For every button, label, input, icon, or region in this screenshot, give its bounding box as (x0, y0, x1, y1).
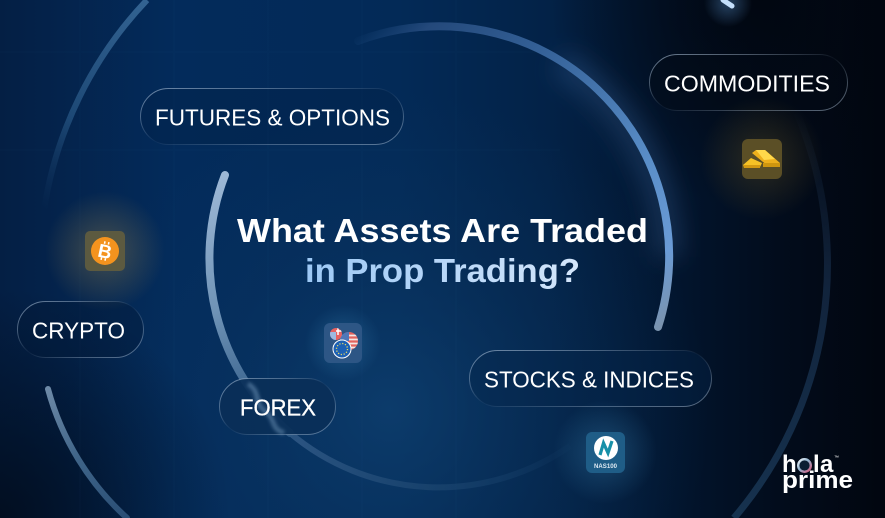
pill: forex (220, 378, 336, 434)
arc: inner blue top right (358, 26, 669, 327)
icon: NAS100 (553, 400, 657, 504)
pill: commodities: COMMODITIES (664, 70, 830, 96)
logo: hola prime: prime (782, 467, 853, 494)
pill: stocks and indices (470, 350, 712, 406)
icon: NAS100: NAS100 (594, 463, 617, 470)
logo: hola prime: ™ (834, 455, 839, 461)
arc: inner left (209, 175, 290, 433)
icon: gold bars (700, 96, 824, 220)
pill: stocks and indices: STOCKS & INDICES (484, 366, 694, 392)
arc: inner bottom (290, 433, 570, 487)
pill: futures and options: FUTURES & OPTIONS (155, 104, 390, 130)
pill: crypto: CRYPTO (32, 318, 125, 344)
icon: bitcoin (45, 191, 165, 311)
arc: inner ring glow (560, 62, 668, 257)
pill: forex: FOREX (240, 394, 316, 420)
title: in Prop Trading? (305, 252, 580, 289)
logo: hola prime (782, 451, 853, 494)
logo: hola prime: hola (782, 451, 834, 478)
arc: outer right (734, 113, 827, 518)
pill: commodities (650, 54, 848, 110)
arc: outer bottom left (48, 389, 127, 518)
title (237, 212, 648, 289)
pill: crypto (18, 302, 144, 358)
title: What Assets Are Traded (237, 212, 648, 249)
icon: forex flags (314, 314, 371, 372)
arc: top right highlight (704, 0, 752, 27)
arc: outer top left (44, 0, 147, 210)
pill: futures and options (140, 88, 404, 144)
icon: bitcoin: B (96, 241, 114, 264)
